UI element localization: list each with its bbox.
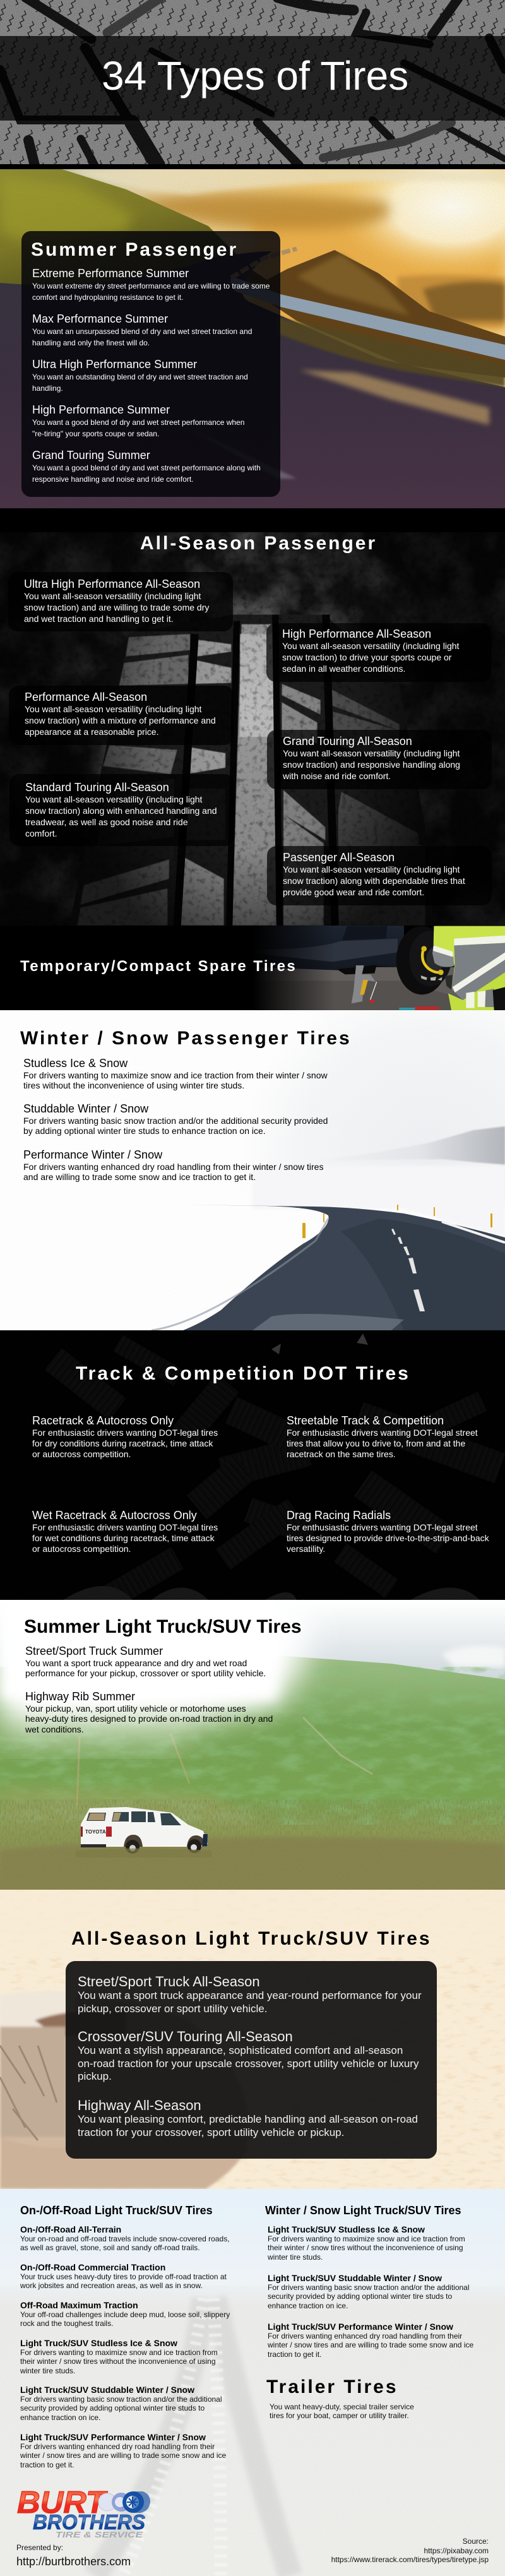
item: performance winter snow: and are willing to trade some snow and ice traction to get it.	[23, 1172, 256, 1182]
item: max performance summer	[32, 313, 252, 347]
title band	[0, 36, 505, 121]
item: light truck suv studdable winter snow	[20, 2385, 222, 2422]
white fog behind text	[0, 1600, 316, 1727]
item: studless ice and snow	[268, 2224, 465, 2262]
item: on off road commercial traction	[20, 2262, 227, 2290]
item: max performance summer: Max Performance Summer	[32, 313, 168, 325]
panel: passenger all-season: snow traction) along with dependable tires that	[283, 876, 465, 886]
panel: ultra high performance all-season: Ultra High Performance All-Season	[24, 578, 200, 590]
item: studless ice and snow: Studless Ice & Snow	[23, 1057, 128, 1070]
item: high performance summer	[32, 403, 244, 438]
item: studless ice and snow: winter tire studs.	[268, 2253, 323, 2262]
item: studdable winter snow: Studdable Winter / Snow	[23, 1102, 148, 1115]
truck: TOYOTA	[85, 1829, 106, 1835]
item: light truck suv studdable winter snow: Light Truck/SUV Studdable Winter / Snow	[20, 2385, 194, 2395]
source credits: Source:	[463, 2537, 489, 2546]
heading: winter snow passenger tires: Winter / Snow Passenger Tires	[20, 1028, 352, 1049]
item: street sport truck summer: You want a sport truck appearance and dry and wet road	[25, 1658, 247, 1668]
text block: trailer tires: tires for your boat, camper or utility trailer.	[270, 2411, 409, 2420]
panel: standard touring all-season	[9, 774, 234, 846]
item: drag racing radials	[287, 1509, 489, 1554]
item: light truck suv studless ice and snow	[20, 2338, 218, 2375]
text block: trailer tires: You want heavy-duty, special trailer service	[270, 2402, 414, 2411]
item: light truck suv performance winter snow: traction to get it.	[20, 2460, 74, 2469]
item: racetrack and autocross only: Racetrack & Autocross Only	[32, 1414, 174, 1427]
heading: summer light truck suv tires: Summer Light Truck/SUV Tires	[24, 1616, 302, 1637]
item: light truck suv performance winter snow: For drivers wanting enhanced dry road handling from their	[20, 2442, 215, 2451]
panel: grand touring all-season	[267, 730, 492, 789]
panel: grand touring all-season: You want all-season versatility (including light	[283, 748, 460, 758]
panel: grand touring all-season: with noise and ride comfort.	[283, 771, 391, 781]
panel: high performance all-season: sedan in all weather conditions.	[282, 664, 405, 674]
item: drag racing radials: For enthusiastic drivers wanting DOT-legal street	[287, 1522, 478, 1532]
heading: winter snow light truck suv tires: Winter / Snow Light Truck/SUV Tires	[265, 2204, 461, 2217]
item: studdable winter snow: For drivers wanting basic snow traction and/or the additional security provided	[23, 1115, 328, 1125]
item: performance winter snow: Light Truck/SUV Performance Winter / Snow	[268, 2322, 453, 2332]
heading: all-season light truck suv tires: All-Season Light Truck/SUV Tires	[71, 1928, 432, 1949]
item: highway all-season	[78, 2097, 418, 2138]
item: light truck suv studdable winter snow: For drivers wanting basic snow traction and/or the additional	[20, 2395, 222, 2404]
item: street sport truck summer: performance for your pickup, crossover or sport utility vehicle.	[25, 1668, 266, 1678]
hero tire tread background	[0, 0, 505, 164]
item: highway all-season: Highway All-Season	[78, 2097, 201, 2113]
item: grand touring summer: Grand Touring Summer	[32, 449, 150, 462]
worker in hi-vis	[432, 926, 505, 1010]
item: studless ice and snow: For drivers wanting to maximize snow and ice traction from their winter / snow	[23, 1070, 328, 1080]
item: racetrack and autocross only: For enthusiastic drivers wanting DOT-legal tires	[32, 1428, 218, 1438]
item: highway rib summer: wet conditions.	[25, 1724, 84, 1734]
item: performance winter snow: Performance Winter / Snow	[23, 1148, 162, 1160]
item: drag racing radials: tires designed to provide drive-to-the-strip-and-back	[287, 1533, 489, 1543]
item: high performance summer: "re-tiring" your sports coupe or sedan.	[32, 429, 159, 438]
panel: high performance all-season: You want all-season versatility (including light	[282, 641, 459, 651]
panel: ultra high performance all-season: snow traction) and are willing to trade some dry	[24, 602, 209, 612]
panel: standard touring all-season: You want all-season versatility (including light	[25, 794, 202, 804]
item: highway rib summer: heavy-duty tires designed to provide on-road traction in dry and	[25, 1714, 273, 1724]
item: drag racing radials: Drag Racing Radials	[287, 1509, 391, 1522]
item: highway rib summer: Highway Rib Summer	[25, 1690, 135, 1702]
item: max performance summer: handling and only the finest will do.	[32, 338, 150, 347]
item: wet racetrack and autocross only: or autocross competition.	[32, 1544, 131, 1554]
panel: high performance all-season: High Performance All-Season	[282, 628, 431, 640]
item: on off road all-terrain: Your on-road and off-road travels include snow-covered roads,	[20, 2234, 230, 2243]
item: off road maximum traction	[20, 2300, 230, 2328]
panel: performance all-season	[9, 686, 234, 745]
website link text: http://burtbrothers.com	[16, 2555, 131, 2568]
item: racetrack and autocross only: or autocross competition.	[32, 1449, 131, 1459]
text block: summer types	[32, 267, 270, 484]
item: crossover suv touring all-season: pickup.	[78, 2070, 112, 2082]
road	[183, 1205, 505, 1330]
heading: track and competition DOT tires: Track & Competition DOT Tires	[76, 1363, 410, 1384]
panel: ultra high performance all-season: You want all-season versatility (including light	[24, 591, 201, 601]
item: light truck suv performance winter snow	[20, 2432, 226, 2469]
item: crossover suv touring all-season	[78, 2029, 419, 2082]
snow posts	[302, 1205, 492, 1238]
text block: winter types	[23, 1057, 328, 1182]
item: performance winter snow: winter / snow tires and are willing to trade some snow and ice	[268, 2340, 473, 2349]
item: high performance summer: High Performance Summer	[32, 403, 170, 416]
item: streetable track and competition: For enthusiastic drivers wanting DOT-legal street	[287, 1428, 478, 1438]
item: wet racetrack and autocross only: Wet Racetrack & Autocross Only	[32, 1509, 197, 1522]
item: crossover suv touring all-season: You want a stylish appearance, sophisticated comfort and all-season	[78, 2044, 403, 2056]
panel: standard touring all-season: snow traction) along with enhanced handling and	[25, 806, 217, 816]
item: ultra high performance summer: handling.	[32, 384, 63, 393]
item: performance winter snow	[268, 2322, 473, 2359]
item: studdable winter snow: by adding optional winter tire studs to enhance traction on ice.	[23, 1126, 266, 1136]
tools	[399, 1006, 439, 1010]
panel: passenger all-season: You want all-season versatility (including light	[283, 864, 460, 874]
item: light truck suv studless ice and snow: winter tire studs.	[20, 2366, 75, 2375]
item: on off road commercial traction: On-/Off-Road Commercial Traction	[20, 2262, 165, 2272]
panel: passenger all-season: Passenger All-Season	[283, 851, 395, 864]
item: racetrack and autocross only	[32, 1414, 218, 1459]
item: streetable track and competition: Streetable Track & Competition	[287, 1414, 444, 1427]
item: extreme performance summer: You want extreme dry street performance and are willing to trade some	[32, 282, 270, 290]
item: high performance summer: You want a good blend of dry and wet street performance when	[32, 418, 244, 427]
text block: winter snow light truck column	[265, 2203, 486, 2361]
guardrail	[230, 277, 505, 360]
panel: passenger all-season	[267, 846, 492, 905]
panel: performance all-season: appearance at a reasonable price.	[25, 727, 158, 737]
item: studless ice and snow: Light Truck/SUV Studless Ice & Snow	[268, 2224, 425, 2234]
item: max performance summer: You want an unsurpassed blend of dry and wet street traction and	[32, 327, 252, 336]
item: studdable winter snow	[23, 1102, 328, 1136]
item: studless ice and snow	[23, 1057, 328, 1090]
heading: temporary compact spare tires: Temporary/Compact Spare Tires	[20, 958, 297, 975]
salt flat tire tracks photo background	[0, 2189, 505, 2576]
lane dashes	[391, 1229, 425, 1311]
item: street sport truck all-season: pickup, crossover or sport utility vehicle.	[78, 2003, 267, 2015]
item: performance winter snow	[23, 1148, 323, 1182]
item: wet racetrack and autocross only: for wet conditions during racetrack, time attack	[32, 1533, 215, 1543]
panel: high performance all-season	[266, 623, 491, 682]
item: performance winter snow: traction to get it.	[268, 2350, 321, 2359]
item: on off road all-terrain: On-/Off-Road All-Terrain	[20, 2224, 121, 2234]
truck	[76, 1807, 211, 1857]
item: streetable track and competition: tires that allow you to drive to, from and at the	[287, 1438, 465, 1448]
panel: grand touring all-season: snow traction) and responsive handling along	[283, 760, 460, 770]
heading: trailer tires: Trailer Tires	[266, 2376, 398, 2397]
panel: high performance all-season: snow traction) to drive your sports coupe or	[282, 652, 451, 662]
panel: ultra high performance all-season: and wet traction and handling to get it.	[24, 614, 174, 624]
item: street sport truck all-season	[78, 1974, 422, 2015]
logo: burt brothers	[13, 2488, 158, 2541]
item: studdable winter snow: security provided by adding optional winter tire studs to	[268, 2292, 452, 2301]
item: street sport truck all-season: You want a sport truck appearance and year-round performance for your	[78, 1989, 422, 2001]
item: studdable winter snow: For drivers wanting basic snow traction and/or the additional	[268, 2283, 470, 2292]
item: performance winter snow: For drivers wanting enhanced dry road handling from their	[268, 2332, 462, 2340]
item: studless ice and snow: For drivers wanting to maximize snow and ice traction from	[268, 2234, 465, 2243]
item: highway all-season: traction for your crossover, sport utility vehicle or pickup.	[78, 2126, 344, 2138]
item: wet racetrack and autocross only: For enthusiastic drivers wanting DOT-legal tires	[32, 1522, 218, 1532]
source credits: https://www.tirerack.com/tires/types/tiretype.jsp	[331, 2555, 489, 2564]
item: highway all-season: You want pleasing comfort, predictable handling and all-season on-road	[78, 2113, 418, 2125]
tire tread, in zoomed coordinates	[69, 614, 433, 926]
item: ultra high performance summer: You want an outstanding blend of dry and wet street traction and	[32, 373, 248, 381]
item: on off road all-terrain	[20, 2224, 230, 2252]
item: light truck suv studless ice and snow: their winter / snow tires without the inconvenience of using	[20, 2357, 216, 2366]
road reflection	[299, 370, 489, 425]
item: ultra high performance summer	[32, 358, 248, 393]
item: street sport truck all-season: Street/Sport Truck All-Season	[78, 1974, 260, 1989]
item: street sport truck summer: Street/Sport Truck Summer	[25, 1644, 163, 1657]
item: light truck suv performance winter snow: winter / snow tires and are willing to trade some snow and ice	[20, 2451, 226, 2460]
text block: on-off-road column	[20, 2204, 230, 2469]
heading: all-season passenger: All-Season Passenger	[140, 533, 377, 554]
panel: ultra high performance all-season	[8, 572, 233, 631]
item: light truck suv performance winter snow: Light Truck/SUV Performance Winter / Snow	[20, 2432, 206, 2442]
panel: all-season light truck suv types	[66, 1961, 437, 2159]
item: studless ice and snow: their winter / snow tires without the inconvenience of using	[268, 2243, 463, 2252]
item: racetrack and autocross only: for dry conditions during racetrack, time attack	[32, 1438, 213, 1448]
item: on off road commercial traction: Your truck uses heavy-duty tires to provide off-road traction at	[20, 2272, 227, 2281]
road	[0, 251, 505, 508]
item: grand touring summer: responsive handling and noise and ride comfort.	[32, 475, 193, 484]
item: grand touring summer: You want a good blend of dry and wet street performance along with	[32, 463, 261, 472]
panel: standard touring all-season: Standard Touring All-Season	[25, 781, 169, 794]
item: studdable winter snow	[268, 2273, 470, 2310]
hills	[0, 169, 271, 289]
item: extreme performance summer: Extreme Performance Summer	[32, 267, 189, 280]
item: off road maximum traction: Off-Road Maximum Traction	[20, 2300, 138, 2310]
item: on off road commercial traction: work jobsites and recreation areas, as well as in snow.	[20, 2281, 203, 2290]
jack	[352, 965, 377, 1003]
item: ultra high performance summer: Ultra High Performance Summer	[32, 358, 197, 371]
spare tire photo background	[259, 926, 505, 1010]
item: extreme performance summer: comfort and hydroplaning resistance to get it.	[32, 293, 183, 302]
item: drag racing radials: versatility.	[287, 1544, 325, 1554]
item: off road maximum traction: rock and the toughest trails.	[20, 2319, 113, 2328]
logo: burt brothers: BROTHERS	[33, 2510, 145, 2534]
presented by: Presented by:	[16, 2543, 63, 2552]
logo: burt brothers: TIRE & SERVICE	[56, 2530, 143, 2539]
item: crossover suv touring all-season: Crossover/SUV Touring All-Season	[78, 2029, 293, 2044]
item: crossover suv touring all-season: on-road traction for your upscale crossover, sport utility vehicle or luxury	[78, 2058, 419, 2070]
item: light truck suv studdable winter snow: enhance traction on ice.	[20, 2413, 100, 2422]
heading: summer passenger: Summer Passenger	[31, 239, 238, 260]
spare wheel	[396, 926, 451, 994]
panel: performance all-season: Performance All-Season	[25, 691, 147, 703]
item: on off road all-terrain: as well as gravel, stone, soil and sandy off-road trails.	[20, 2243, 200, 2252]
item: streetable track and competition	[287, 1414, 478, 1459]
track tires photo background	[45, 1333, 504, 1846]
item: performance winter snow: For drivers wanting enhanced dry road handling from their winter / snow tires	[23, 1162, 323, 1172]
panel: performance all-season: You want all-season versatility (including light	[25, 704, 201, 714]
item: extreme performance summer	[32, 267, 270, 302]
item: studdable winter snow: Light Truck/SUV Studdable Winter / Snow	[268, 2273, 442, 2283]
summer truck field photo background	[0, 1600, 505, 1890]
item: streetable track and competition: racetrack on the same tires.	[287, 1449, 396, 1459]
item: light truck suv studless ice and snow: Light Truck/SUV Studless Ice & Snow	[20, 2338, 177, 2348]
item: studless ice and snow: tires without the inconvenience of using winter tire studs.	[23, 1080, 244, 1090]
desert tire photo background	[0, 1890, 505, 2189]
panel: summer passenger	[21, 231, 280, 497]
all-season tire photo background	[0, 532, 505, 926]
sunset road photo background	[0, 169, 505, 508]
panel: standard touring all-season: comfort.	[25, 828, 57, 838]
panel: grand touring all-season: Grand Touring All-Season	[283, 735, 412, 748]
panel: standard touring all-season: treadwear, as well as good noise and ride	[25, 817, 188, 827]
item: highway rib summer: Your pickup, van, sport utility vehicle or motorhome uses	[25, 1703, 246, 1714]
panel: passenger all-season: provide good wear and ride comfort.	[283, 887, 424, 897]
panel: performance all-season: snow traction) with a mixture of performance and	[25, 715, 216, 725]
item: light truck suv studdable winter snow: security provided by adding optional winter tire studs to	[20, 2404, 205, 2412]
item: grand touring summer	[32, 449, 261, 484]
item: light truck suv studless ice and snow: For drivers wanting to maximize snow and ice traction from	[20, 2348, 218, 2357]
item: wet racetrack and autocross only	[32, 1509, 218, 1554]
text block: trailer tires	[270, 2402, 414, 2421]
item: highway rib summer	[25, 1690, 273, 1734]
source credits	[331, 2537, 489, 2565]
item: off road maximum traction: Your off-road challenges include deep mud, loose soil, slippery	[20, 2310, 230, 2319]
source credits: https://pixabay.com	[424, 2546, 489, 2555]
title: 34 Types of Tires	[102, 53, 408, 98]
winter road photo background	[0, 1010, 505, 1330]
heading: on off road light truck suv tires: On-/Off-Road Light Truck/SUV Tires	[20, 2204, 213, 2217]
item: studdable winter snow: enhance traction on ice.	[268, 2301, 348, 2310]
item: street sport truck summer	[25, 1644, 266, 1678]
